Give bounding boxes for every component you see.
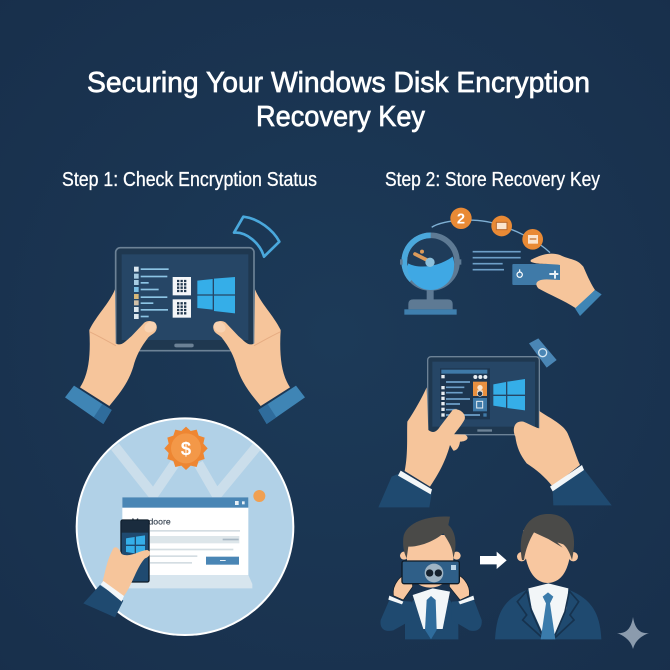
right hand (514, 411, 612, 505)
hands (393, 573, 469, 600)
key card (512, 264, 560, 285)
tablet (428, 357, 539, 435)
phone (402, 561, 459, 584)
orange dot (253, 490, 265, 502)
app tiles (173, 277, 191, 318)
connector arc (432, 220, 550, 253)
gauge (400, 235, 461, 315)
icon: orange dollar badge (164, 427, 208, 470)
windows logo (197, 277, 235, 313)
head (400, 552, 408, 560)
panel: second tablet in hands (378, 338, 612, 507)
icon: orange dollar badge: $ (181, 438, 192, 459)
file list (134, 267, 169, 319)
right hand (212, 289, 305, 424)
left hand (65, 289, 158, 424)
icon: sparkle (617, 617, 649, 649)
browser window (122, 497, 252, 588)
text lines (473, 252, 521, 270)
file panel (440, 368, 490, 419)
key fob (529, 338, 557, 368)
panel: hands holding tablet (65, 217, 305, 424)
hand holding phone (83, 547, 150, 617)
heading: step 2: Step 2: Store Recovery Key (385, 169, 600, 191)
numbered steps: 2 (457, 212, 465, 228)
title: Recovery Key (256, 101, 425, 133)
person with phone (380, 516, 482, 639)
numbered steps (450, 208, 543, 250)
icon: wireless arc (234, 217, 279, 257)
hand holding key (531, 254, 602, 316)
title (87, 67, 590, 133)
panel: people comparison (380, 514, 601, 639)
tablet (116, 248, 254, 351)
browser window: Mandoore (132, 516, 171, 526)
panel: circle with browser and phone (77, 418, 293, 635)
panel: gauge and recovery key (400, 208, 602, 316)
heading: step 1: Step 1: Check Encryption Status (62, 169, 317, 191)
arrow (480, 552, 507, 569)
sleeves and body (405, 600, 458, 639)
phone (121, 520, 149, 582)
left hand (378, 387, 468, 507)
windows logo (493, 379, 525, 410)
title: Securing Your Windows Disk Encryption (87, 67, 590, 99)
person (495, 514, 601, 639)
